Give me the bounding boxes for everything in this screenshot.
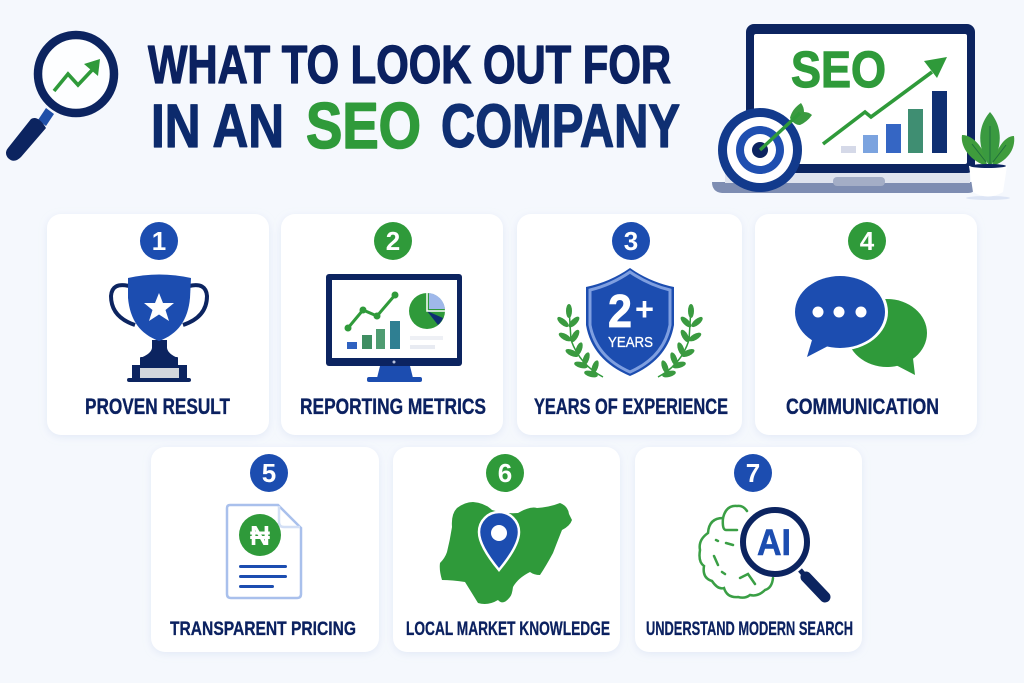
icon: monitor dashboard xyxy=(326,274,462,382)
potted plant xyxy=(962,112,1014,200)
number badge 1 xyxy=(140,222,178,260)
number badge 3 xyxy=(612,222,650,260)
number badge 1: 1 xyxy=(152,226,166,256)
number badge 6 xyxy=(486,454,524,492)
icon: map of Nigeria with pin xyxy=(440,502,572,604)
panel: card 2 reporting metrics xyxy=(281,214,503,435)
number badge 2 xyxy=(374,222,412,260)
label: TRANSPARENT PRICING xyxy=(170,618,356,640)
icon: price document: ₦ xyxy=(250,520,270,551)
panel: card 5 transparent pricing xyxy=(151,447,379,652)
target with dart xyxy=(718,103,812,192)
number badge 7: 7 xyxy=(746,458,760,488)
SEO screen text: SEO xyxy=(791,41,886,98)
number badge 5: 5 xyxy=(262,458,276,488)
title: WHAT TO LOOK OUT FOR xyxy=(148,35,671,95)
title: COMPANY xyxy=(441,92,680,160)
icon: magnifier with AI: AI xyxy=(757,522,791,563)
icon: price document xyxy=(227,505,301,598)
label: COMMUNICATION xyxy=(786,394,939,419)
panel: card 1 proven result xyxy=(47,214,269,435)
title: IN AN xyxy=(151,92,284,160)
panel: card 3 years of experience xyxy=(517,214,742,435)
panel: card 4 communication xyxy=(755,214,977,435)
icon: trophy xyxy=(111,274,207,382)
icon: brain outline xyxy=(700,506,773,598)
bar chart xyxy=(841,91,947,153)
number badge 4: 4 xyxy=(860,226,875,256)
panel: card 6 local market knowledge xyxy=(393,447,620,652)
icon: shield 2+ years: YEARS xyxy=(608,334,653,351)
laptop xyxy=(712,24,975,193)
number badge 2: 2 xyxy=(386,226,400,256)
label: REPORTING METRICS xyxy=(300,394,486,419)
icon: laurel branches xyxy=(556,304,704,379)
number badge 5 xyxy=(250,454,288,492)
growth arrow xyxy=(823,57,947,144)
icon: shield 2+ years: 2 xyxy=(608,285,632,337)
icon: magnifier with AI xyxy=(743,510,825,597)
number badge 4 xyxy=(848,222,886,260)
title: SEO xyxy=(306,89,421,162)
label: UNDERSTAND MODERN SEARCH xyxy=(646,618,853,640)
icon: shield 2+ years: + xyxy=(635,291,654,327)
panel: card 7 understand modern search xyxy=(635,447,862,652)
icon: speech bubbles xyxy=(792,274,927,375)
illustration: laptop with SEO chart xyxy=(712,24,1014,200)
number badge 3: 3 xyxy=(624,226,638,256)
icon: shield 2+ years xyxy=(586,268,674,376)
label: LOCAL MARKET KNOWLEDGE xyxy=(406,618,610,640)
label: YEARS OF EXPERIENCE xyxy=(534,394,728,419)
icon: magnifying glass with growth arrow xyxy=(6,35,114,161)
number badge 6: 6 xyxy=(498,458,512,488)
title xyxy=(148,35,680,162)
label: PROVEN RESULT xyxy=(85,394,230,419)
number badge 7 xyxy=(734,454,772,492)
